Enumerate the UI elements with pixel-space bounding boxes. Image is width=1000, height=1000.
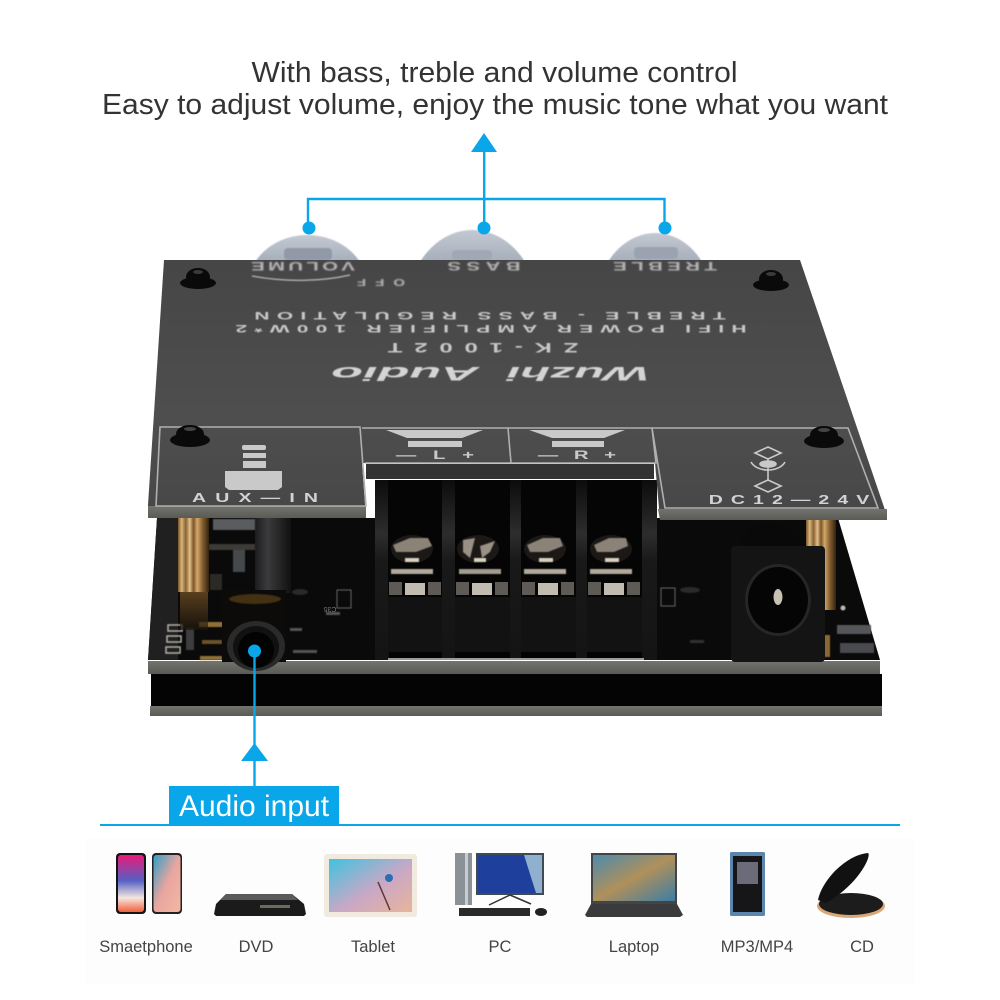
- device labels: Smaetphone: [99, 938, 193, 956]
- screw bottom left: [170, 425, 210, 447]
- upside-down silkscreen text: HIFI POWER AMPLIFIER 100W*2: [235, 322, 747, 335]
- screw bottom right: [804, 426, 844, 448]
- front edge right: [658, 509, 887, 520]
- brass standoff left: [178, 518, 209, 592]
- brand script: Audio: [331, 362, 482, 383]
- screw top left: [180, 268, 216, 289]
- panel outlines: [156, 427, 878, 508]
- device labels: MP3/MP4: [721, 938, 793, 956]
- callout: audio input arrow: [241, 644, 268, 789]
- screw top right: [753, 270, 789, 291]
- device labels: PC: [489, 938, 512, 956]
- C35 silkscreen: C35: [323, 605, 336, 612]
- device labels: Laptop: [609, 938, 659, 956]
- bottom slots: [389, 652, 642, 659]
- device labels: CD: [850, 938, 874, 956]
- component details: [166, 544, 874, 660]
- knob labels: [251, 259, 717, 288]
- terminal screw 3: [522, 535, 574, 595]
- aux jack socket: [222, 590, 286, 671]
- device labels: [99, 938, 874, 956]
- icon: aux plug: [225, 445, 282, 490]
- terminal screw 2: [456, 535, 508, 595]
- knob labels: VOLUME: [251, 259, 355, 273]
- lower circuit board: [148, 518, 880, 660]
- capacitor: [255, 518, 291, 593]
- device strip background: [85, 838, 915, 984]
- base highlight: [388, 658, 644, 660]
- device labels: Tablet: [351, 938, 395, 956]
- icon: MP3 player: [730, 852, 765, 916]
- brand script: [331, 362, 650, 383]
- icon: desktop PC: [455, 853, 547, 916]
- speaker icon R: [529, 430, 625, 462]
- brass standoff right: [806, 518, 836, 610]
- terminal block: [375, 480, 657, 660]
- DC power socket: [731, 522, 825, 662]
- title: With bass, treble and volume control: [252, 57, 738, 89]
- divider: [100, 824, 900, 826]
- top plate: [148, 259, 887, 520]
- upside-down silkscreen text: [235, 309, 747, 355]
- icon: DVD player: [214, 894, 306, 916]
- title: Easy to adjust volume, enjoy the music tone what you want: [102, 89, 888, 121]
- icon: DC polarity: [751, 447, 785, 492]
- dividers: [375, 480, 657, 660]
- standoff reflection left: [180, 592, 208, 630]
- upside-down silkscreen text: TREBLE - BASS REGULATION: [254, 309, 726, 322]
- capacitor top sheen: [213, 519, 255, 530]
- lower board edge: [148, 661, 880, 674]
- icon: laptop: [585, 853, 683, 917]
- terminal screw 1: [389, 535, 441, 595]
- speaker icon L: [386, 430, 483, 462]
- volume switch arc: [252, 275, 350, 280]
- AUX-IN label: AUX—IN: [192, 490, 318, 505]
- terminal recess lip: [366, 464, 654, 479]
- terminal screw 4: [588, 535, 640, 595]
- knob labels: BASS: [447, 259, 521, 273]
- speaker icon L: —L+: [396, 448, 474, 462]
- brand script: Wuzhi: [505, 362, 650, 383]
- title: [102, 57, 888, 121]
- knob labels: OFF: [357, 277, 405, 288]
- DC voltage label: DC12—24V: [709, 492, 869, 507]
- icon: smartphones: [116, 853, 182, 914]
- front edge left: [148, 506, 366, 518]
- icon: tablet: [324, 854, 417, 917]
- callout: controls arrow: [302, 133, 672, 234]
- knob labels: TREBLE: [613, 259, 717, 273]
- device labels: DVD: [239, 938, 273, 956]
- icon: portable CD player: [817, 853, 885, 918]
- speaker icon R: —R+: [538, 448, 616, 462]
- base plate: [150, 674, 882, 716]
- audio input label: Audio input: [179, 790, 330, 823]
- knobs behind the board: [255, 230, 702, 262]
- upside-down silkscreen text: ZK-1002T: [388, 339, 578, 355]
